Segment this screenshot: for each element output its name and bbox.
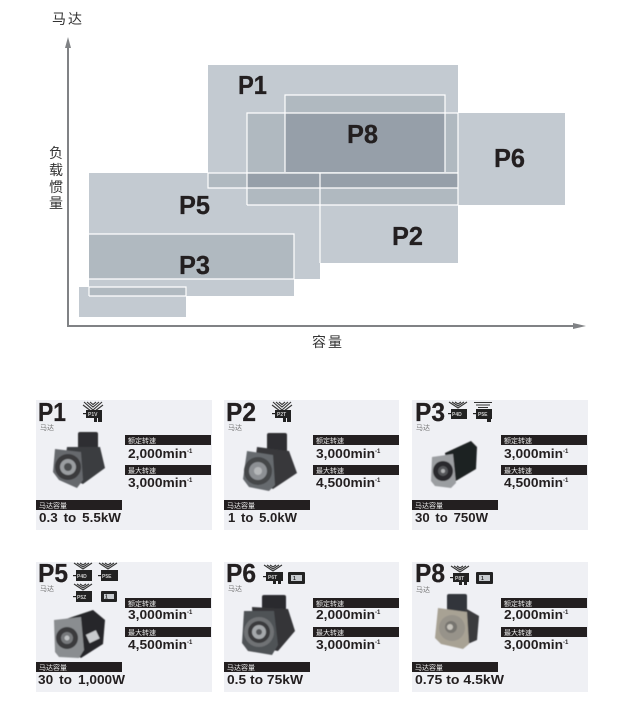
max speed: 最大转速 <box>316 466 344 475</box>
axis label: load inertia: 惯 <box>49 179 63 195</box>
heading P2: P2 <box>226 397 256 427</box>
icon: P5 driver 2: P5E <box>102 574 112 580</box>
max speed: 最大转速 <box>128 466 156 475</box>
icon: P5 driver 3 <box>73 584 92 602</box>
max speed: 最大转速 <box>504 628 532 637</box>
panel: P6: 马达 <box>228 584 242 593</box>
chart label P6: P6 <box>494 143 525 173</box>
rated speed: -1 <box>375 610 381 616</box>
max speed: -1 <box>563 478 569 484</box>
max speed: -1 <box>187 640 193 646</box>
chart: capacity vs load inertia <box>49 11 586 350</box>
icon: P1 driver: P1V <box>88 412 98 418</box>
motor capacity <box>412 500 498 525</box>
axis label: motor: 马达 <box>52 11 82 27</box>
rated speed <box>313 598 399 622</box>
rated speed <box>501 598 587 622</box>
motor capacity: 马达容量 <box>415 663 443 672</box>
max speed: -1 <box>563 640 569 646</box>
region: P5 <box>89 173 320 279</box>
icon: P8 box driver <box>476 572 493 584</box>
rated speed <box>501 435 587 461</box>
icon: P2 driver: P2T <box>277 412 286 418</box>
motor capacity <box>224 500 310 525</box>
icon: P5 driver 3: P5Z <box>77 595 86 601</box>
max speed <box>125 627 211 652</box>
motor capacity <box>36 500 122 525</box>
max speed: -1 <box>187 478 193 484</box>
region outlines <box>89 95 458 296</box>
max speed: 4,500min <box>504 476 563 490</box>
max speed: -1 <box>375 640 381 646</box>
motor capacity: 0.5 to 75kW <box>227 673 303 687</box>
max speed: 3,000min <box>504 638 563 652</box>
motor photo <box>435 594 479 649</box>
motor capacity <box>412 662 504 687</box>
motor capacity: 马达容量 <box>415 501 443 510</box>
max speed: 最大转速 <box>316 628 344 637</box>
chart label P1: P1 <box>238 70 267 100</box>
icon: P5 box driver: 1 <box>105 594 108 600</box>
max speed: 最大转速 <box>504 466 532 475</box>
icon: P3 driver 2: P5E <box>478 412 488 418</box>
max speed <box>313 465 399 490</box>
region: P2 <box>320 205 458 263</box>
heading P1: P1 <box>38 397 66 427</box>
motor capacity: 马达容量 <box>39 501 67 510</box>
overlap regions medium <box>89 95 458 296</box>
rated speed <box>125 435 211 461</box>
max speed <box>501 627 587 652</box>
rated speed: 2,000min <box>128 447 187 461</box>
panel: P8: 马达 <box>416 585 430 594</box>
axis label: load inertia: 载 <box>49 162 63 178</box>
icon: P5 driver 1: P4D <box>77 574 87 580</box>
max speed: 4,500min <box>316 476 375 490</box>
overlap regions dark <box>247 113 458 188</box>
motor capacity: 0.3 to 5.5kW <box>39 511 121 525</box>
panel: P1: 马达 <box>40 423 54 432</box>
motor capacity: 0.75 to 4.5kW <box>415 673 504 687</box>
motor photo <box>54 610 105 658</box>
rated speed: 3,000min <box>316 447 375 461</box>
axis label: load inertia: 量 <box>49 195 63 211</box>
icon: P8 driver: P8T <box>455 576 464 582</box>
rated speed: -1 <box>563 610 569 616</box>
heading P6: P6 <box>226 558 256 588</box>
max speed: 最大转速 <box>128 628 156 637</box>
motor capacity: 30 to 750W <box>415 511 488 525</box>
icon: P3 driver 1: P4D <box>452 412 462 418</box>
panel: P8 <box>412 558 588 692</box>
max speed <box>125 465 211 490</box>
rated speed: 3,000min <box>504 447 563 461</box>
heading P8: P8 <box>415 558 445 588</box>
heading P3: P3 <box>415 397 445 427</box>
rated speed <box>313 435 399 461</box>
motor capacity: 马达容量 <box>227 663 255 672</box>
rated speed: 额定转速 <box>504 436 532 445</box>
motor capacity <box>36 662 125 687</box>
region: P1 <box>208 65 458 188</box>
motor photo <box>53 432 105 488</box>
region: P3 lower band <box>89 279 294 296</box>
icon: P8 driver <box>450 566 469 585</box>
rated speed: -1 <box>187 610 193 616</box>
panel: P3 <box>412 397 588 530</box>
panel: P3: 马达 <box>416 423 430 432</box>
y axis with arrow <box>65 37 71 327</box>
chart label P2: P2 <box>392 221 423 251</box>
axis label: capacity: 容量 <box>312 334 342 350</box>
icon: P1 driver <box>83 402 103 422</box>
rated speed: 额定转速 <box>504 599 532 608</box>
icon: P5 driver 2 <box>98 563 118 581</box>
chart label P3: P3 <box>179 250 210 280</box>
icon: P5 driver 1 <box>73 563 92 581</box>
motor capacity: 30 to 1,000W <box>38 673 125 687</box>
rated speed: 2,000min <box>316 608 375 622</box>
max speed <box>501 465 587 490</box>
icon: P6 driver <box>263 565 283 584</box>
motor photo <box>242 595 295 655</box>
region: smallest motor range <box>79 287 186 317</box>
x axis with arrow <box>67 323 586 329</box>
rated speed: 2,000min <box>504 608 563 622</box>
icon: P6 driver: P6T <box>268 575 277 581</box>
max speed: -1 <box>375 478 381 484</box>
panel: P5 <box>36 558 212 692</box>
panel: P5: 马达 <box>40 584 54 593</box>
rated speed: 3,000min <box>128 608 187 622</box>
icon: P6 box driver: 1 <box>293 576 296 582</box>
max speed: 3,000min <box>128 476 187 490</box>
rated speed: 额定转速 <box>128 436 156 445</box>
icon: P3 driver 1 <box>448 402 467 419</box>
chart label P8: P8 <box>347 119 378 149</box>
rated speed <box>125 598 211 622</box>
icon: P6 box driver <box>288 572 305 584</box>
rated speed: 额定转速 <box>316 599 344 608</box>
motor photo <box>431 441 477 488</box>
panel: P6 <box>224 558 399 692</box>
motor capacity: 马达容量 <box>227 501 255 510</box>
rated speed: -1 <box>375 449 381 455</box>
motor capacity: 马达容量 <box>39 663 67 672</box>
rated speed: 额定转速 <box>316 436 344 445</box>
icon: P8 box driver: 1 <box>481 576 484 582</box>
motor capacity: 1 to 5.0kW <box>228 511 297 525</box>
rated speed: 额定转速 <box>128 599 156 608</box>
rated speed: -1 <box>563 449 569 455</box>
panel: P2 <box>224 397 399 530</box>
motor photo <box>243 433 297 491</box>
panel: P1 <box>36 397 212 530</box>
icon: P5 box driver <box>101 591 117 602</box>
heading P5: P5 <box>38 558 68 588</box>
max speed: 3,000min <box>316 638 375 652</box>
region: P6 <box>458 113 565 205</box>
chart label P5: P5 <box>179 190 210 220</box>
max speed: 4,500min <box>128 638 187 652</box>
max speed <box>313 627 399 652</box>
panel: P2: 马达 <box>228 423 242 432</box>
rated speed: -1 <box>187 449 193 455</box>
motor capacity <box>224 662 310 687</box>
icon: P2 driver <box>272 402 292 422</box>
axis label: load inertia <box>49 145 63 211</box>
icon: P3 driver 2 <box>473 402 492 422</box>
axis label: load inertia: 负 <box>49 145 63 161</box>
